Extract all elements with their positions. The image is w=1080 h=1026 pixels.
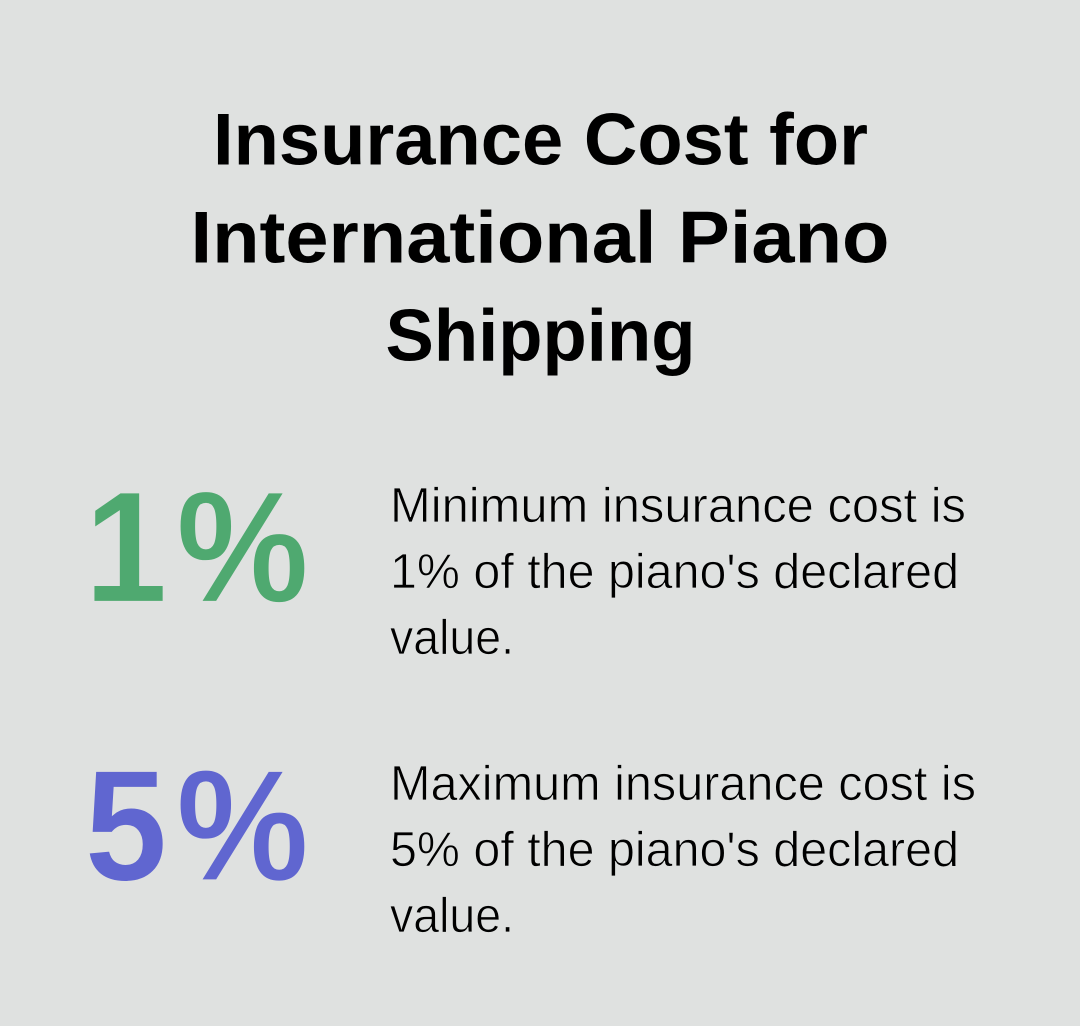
text block: minimum description — [390, 479, 966, 665]
text block: minimum description: Minimum insurance cost is — [390, 479, 966, 533]
text block: maximum description: value. — [390, 889, 514, 943]
statistic: 5%: 5% — [84, 737, 309, 914]
title: International Piano — [190, 198, 890, 278]
text block: maximum description: Maximum insurance cost is — [390, 757, 976, 811]
title: Shipping — [386, 296, 696, 376]
text block: maximum description — [390, 757, 976, 943]
panel: minimum insurance cost — [84, 458, 966, 665]
text block: minimum description: value. — [390, 611, 514, 665]
title: Insurance Cost for — [213, 100, 868, 180]
panel: maximum insurance cost — [84, 737, 976, 943]
title — [190, 100, 890, 376]
text block: minimum description: 1% of the piano's declared — [390, 545, 959, 599]
text block: maximum description: 5% of the piano's declared — [390, 823, 959, 877]
statistic: 1%: 1% — [84, 458, 309, 635]
